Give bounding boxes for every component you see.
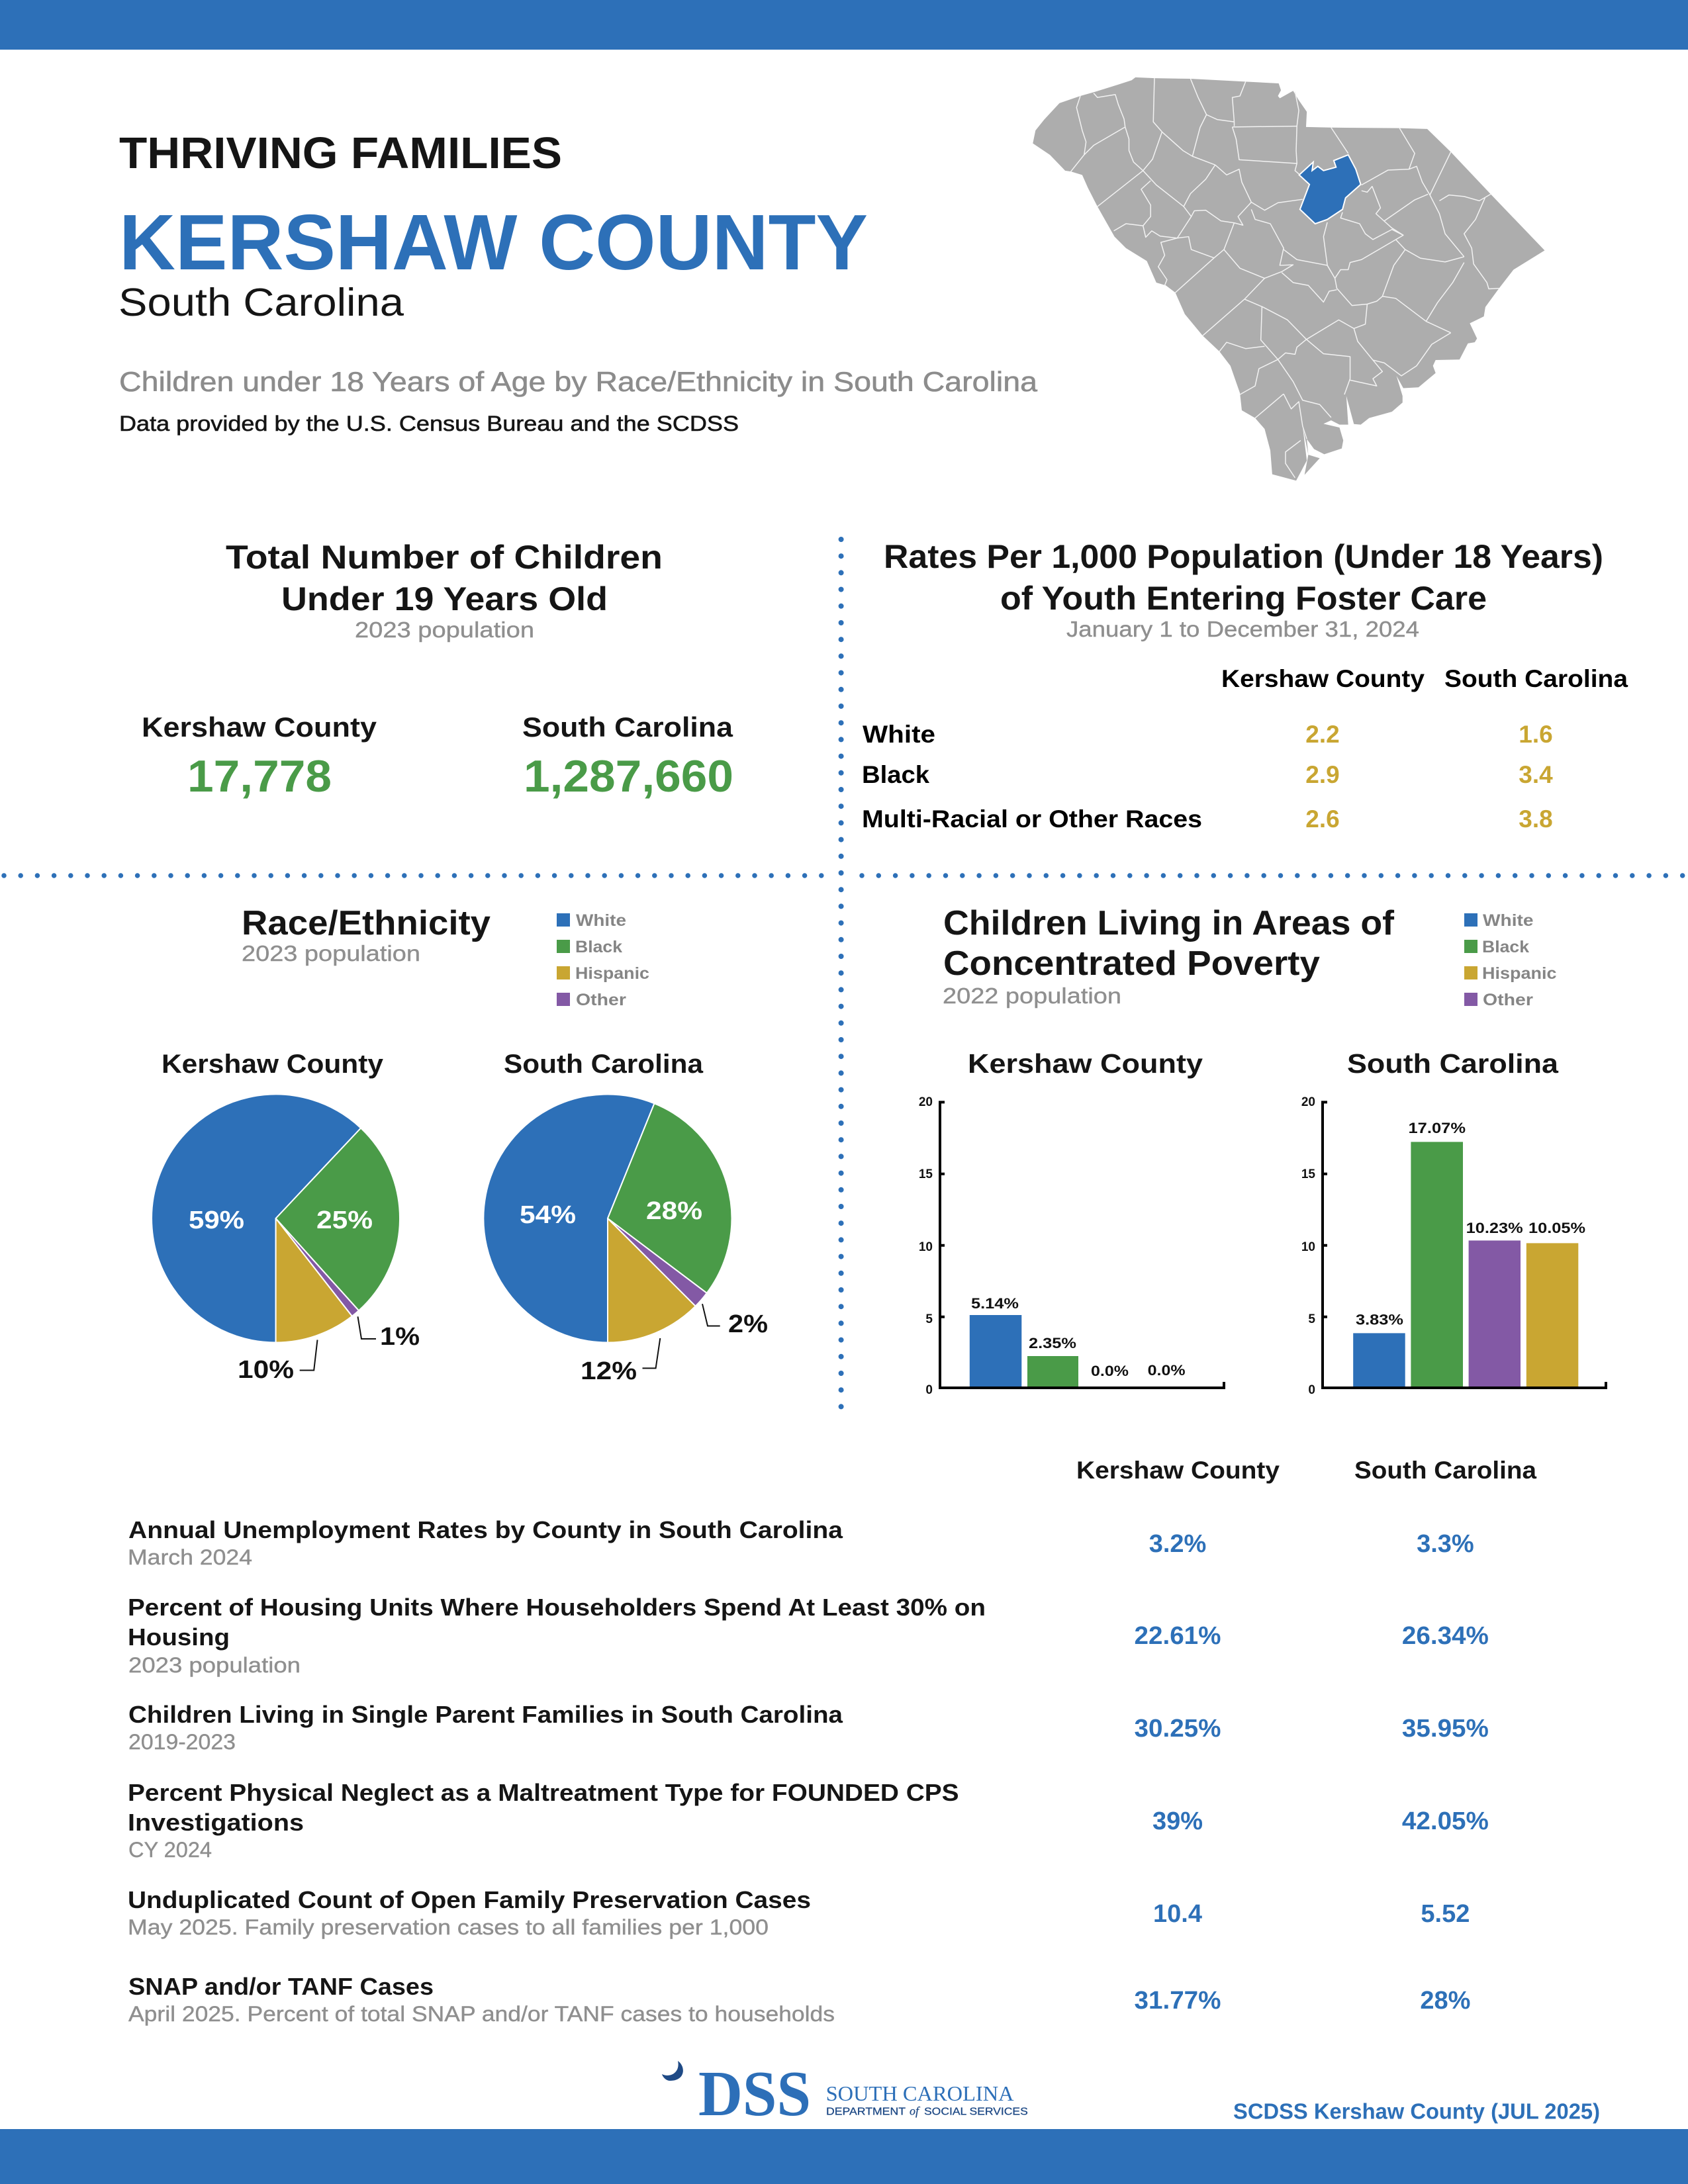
row: physical neglect: CY 2024 (128, 1838, 212, 1862)
title: Kershaw County: KERSHAW COUNTY (119, 199, 868, 287)
bottom banner (0, 2129, 1688, 2184)
panel subheading: 2022 population (943, 983, 1121, 1008)
pie labels: Kershaw County: 25% (316, 1206, 373, 1234)
row: family preservation cases: 5.52 (1421, 1900, 1470, 1928)
heading: thriving families: THRIVING FAMILIES (119, 128, 562, 178)
bar chart: Kershaw County: 10 (919, 1240, 933, 1254)
pie chart: Kershaw County (152, 1095, 400, 1342)
row: family preservation cases: Unduplicated Count of Open Family Preservation Cases (128, 1886, 811, 1913)
bar chart: South Carolina: 20 (1301, 1095, 1315, 1109)
row: single parent families: 30.25% (1135, 1715, 1221, 1743)
pie labels: Kershaw County (189, 1206, 420, 1384)
description: Children under 18 Years of Age by Race/Ethnicity in South Carolina (119, 366, 1038, 397)
bar chart: South Carolina: 3.83% (1356, 1311, 1403, 1328)
pie labels: South Carolina: 28% (646, 1197, 702, 1225)
rate values: 2.9 (1305, 761, 1340, 788)
pie labels: Kershaw County: 59% (189, 1206, 244, 1234)
subtitle: South Carolina: South Carolina (118, 281, 404, 324)
panel: total number of children (142, 539, 733, 801)
department line: DEPARTMENT (826, 2107, 906, 2118)
pie chart: South Carolina (483, 1094, 731, 1343)
panel: children in concentrated poverty (919, 904, 1606, 1397)
footer note: SCDSS Kershaw County (JUL 2025) (1233, 2099, 1600, 2124)
Kershaw County total: 17,778 (187, 751, 332, 801)
legend: Hispanic (575, 964, 649, 983)
row: SNAP and TANF: 28% (1420, 1987, 1470, 2015)
row: housing cost: 26.34% (1402, 1622, 1489, 1650)
Kershaw County highlight (1299, 155, 1361, 224)
legend: Other (576, 991, 626, 1009)
row: unemployment (128, 1516, 1474, 1569)
legend: Other (1483, 991, 1533, 1009)
map: South Carolina counties with Kershaw highlighted (1033, 77, 1544, 480)
row: unemployment: 3.3% (1417, 1530, 1474, 1558)
bar chart: Kershaw County: 20 (919, 1095, 933, 1109)
row: SNAP and TANF: April 2025. Percent of total SNAP and/or TANF cases to households (128, 2002, 835, 2026)
row: single parent families: 35.95% (1402, 1715, 1489, 1743)
bar chart: South Carolina: 0 (1308, 1383, 1315, 1397)
panel heading: Rates Per 1,000 Population (Under 18 Years) (884, 538, 1603, 575)
department line: of (910, 2105, 921, 2118)
row: physical neglect: Percent Physical Neglect as a Maltreatment Type for FOUNDED CPS (128, 1779, 959, 1806)
county borders (1071, 78, 1499, 478)
DSS wordmark: DSS (698, 2058, 811, 2129)
bar chart: Kershaw County: 0.0% (1148, 1362, 1186, 1379)
rate values: 1.6 (1519, 721, 1553, 748)
row: unemployment: March 2024 (128, 1545, 252, 1569)
rate values: 3.4 (1519, 761, 1553, 788)
logo: SC Department of Social Services (662, 2058, 1028, 2129)
row: housing cost (128, 1594, 1489, 1677)
bar chart: Kershaw County: 2.35% (1029, 1335, 1076, 1351)
bar chart: South Carolina: 5 (1308, 1312, 1315, 1326)
row: single parent families (128, 1701, 1489, 1754)
row: unemployment: 3.2% (1149, 1530, 1206, 1558)
legend (1464, 911, 1557, 1009)
rate values: 2.2 (1305, 721, 1340, 748)
bar chart: Kershaw County: 0.0% (1091, 1363, 1129, 1379)
chart heading: Kershaw County: Kershaw County (968, 1048, 1203, 1079)
panel heading line 2: Under 19 Years Old (281, 580, 608, 617)
bar chart: South Carolina (1301, 1095, 1606, 1397)
bar chart: Kershaw County: 5.14% (971, 1295, 1019, 1312)
column header: South Carolina: South Carolina (1444, 665, 1628, 692)
bar chart: Kershaw County: 0 (925, 1383, 933, 1397)
bar chart: Kershaw County: 15 (919, 1167, 933, 1181)
South Carolina label: South Carolina (522, 711, 733, 743)
row: housing cost: Housing (128, 1623, 230, 1651)
department line (826, 2105, 1028, 2118)
bar chart: Kershaw County: 5 (925, 1312, 933, 1326)
legend: Black (1482, 938, 1529, 956)
row: physical neglect: 42.05% (1402, 1807, 1489, 1835)
pie labels: Kershaw County: 1% (380, 1323, 420, 1351)
row: SNAP and TANF: SNAP and/or TANF Cases (128, 1973, 434, 2000)
row: physical neglect (128, 1779, 1489, 1862)
panel subheading: 2023 population (242, 941, 420, 966)
row label: White: White (863, 721, 935, 748)
South Carolina wordmark: SOUTH CAROLINA (826, 2081, 1014, 2105)
pie labels: Kershaw County: 10% (238, 1356, 294, 1384)
row: SNAP and TANF (128, 1973, 1470, 2026)
bar chart: South Carolina: 10 (1301, 1240, 1315, 1254)
panel subheading: 2023 population (355, 617, 534, 642)
legend: White (1483, 911, 1534, 930)
table: county indicators (128, 1457, 1536, 2026)
row label: Black: Black (862, 761, 929, 788)
row: SNAP and TANF: 31.77% (1135, 1987, 1221, 2015)
header text block (118, 128, 1038, 435)
chart heading: South Carolina: South Carolina (1347, 1048, 1559, 1079)
data source note: Data provided by the U.S. Census Bureau and the SCDSS (119, 412, 739, 435)
South Carolina total: 1,287,660 (524, 751, 733, 801)
row label: Multi-Racial: Multi-Racial or Other Races (862, 805, 1202, 833)
panel heading line 2: of Youth Entering Foster Care (1000, 580, 1487, 617)
bar chart: South Carolina: 10.05% (1528, 1220, 1585, 1236)
legend: Black (575, 938, 622, 956)
panel: race/ethnicity (152, 904, 768, 1385)
row: housing cost: 22.61% (1135, 1622, 1221, 1650)
row: physical neglect: 39% (1152, 1807, 1203, 1835)
legend: Hispanic (1482, 964, 1557, 983)
row: single parent families: Children Living in Single Parent Families in South Carolina (128, 1701, 843, 1728)
pie labels: South Carolina: 12% (581, 1357, 637, 1385)
panel heading line 2: Concentrated Poverty (943, 944, 1320, 983)
legend (557, 911, 649, 1009)
column header: Kershaw County: Kershaw County (1076, 1457, 1280, 1484)
top banner (0, 0, 1688, 50)
column header: South Carolina: South Carolina (1354, 1457, 1536, 1484)
rate values: 3.8 (1519, 805, 1553, 833)
Kershaw County label: Kershaw County (142, 711, 377, 743)
panel heading: Total Number of Children (226, 539, 663, 576)
row: family preservation cases (128, 1886, 1470, 1939)
row: housing cost: Percent of Housing Units Where Householders Spend At Least 30% on (128, 1594, 986, 1621)
row: physical neglect: Investigations (128, 1809, 304, 1836)
state outline (1033, 77, 1544, 480)
icon: crescent moon (662, 2061, 683, 2081)
row: family preservation cases: May 2025. Family preservation cases to all families per 1,000 (128, 1915, 769, 1939)
panel heading: Race/Ethnicity (242, 904, 491, 942)
panel: foster care rates (862, 538, 1628, 833)
rate values (1305, 721, 1553, 833)
bar chart: Kershaw County (919, 1095, 1224, 1397)
pie labels: South Carolina: 2% (728, 1310, 768, 1338)
panel subheading: January 1 to December 31, 2024 (1066, 617, 1419, 641)
pie labels: South Carolina (520, 1197, 768, 1385)
row: family preservation cases: 10.4 (1153, 1900, 1202, 1928)
panel heading: Children Living in Areas of (943, 904, 1395, 942)
bar chart: South Carolina: 10.23% (1466, 1220, 1523, 1236)
legend: White (576, 911, 626, 930)
bar chart: South Carolina: 15 (1301, 1167, 1315, 1181)
row: unemployment: Annual Unemployment Rates by County in South Carolina (128, 1516, 843, 1543)
pie heading: South Carolina: South Carolina (504, 1050, 704, 1079)
row: housing cost: 2023 population (128, 1653, 301, 1677)
department line: SOCIAL SERVICES (924, 2107, 1028, 2118)
bar chart: South Carolina: 17.07% (1409, 1120, 1466, 1136)
rate values: 2.6 (1305, 805, 1340, 833)
pie heading: Kershaw County: Kershaw County (162, 1050, 384, 1079)
row: single parent families: 2019-2023 (128, 1730, 236, 1754)
column header: Kershaw County: Kershaw County (1221, 665, 1425, 692)
pie labels: South Carolina: 54% (520, 1201, 576, 1229)
